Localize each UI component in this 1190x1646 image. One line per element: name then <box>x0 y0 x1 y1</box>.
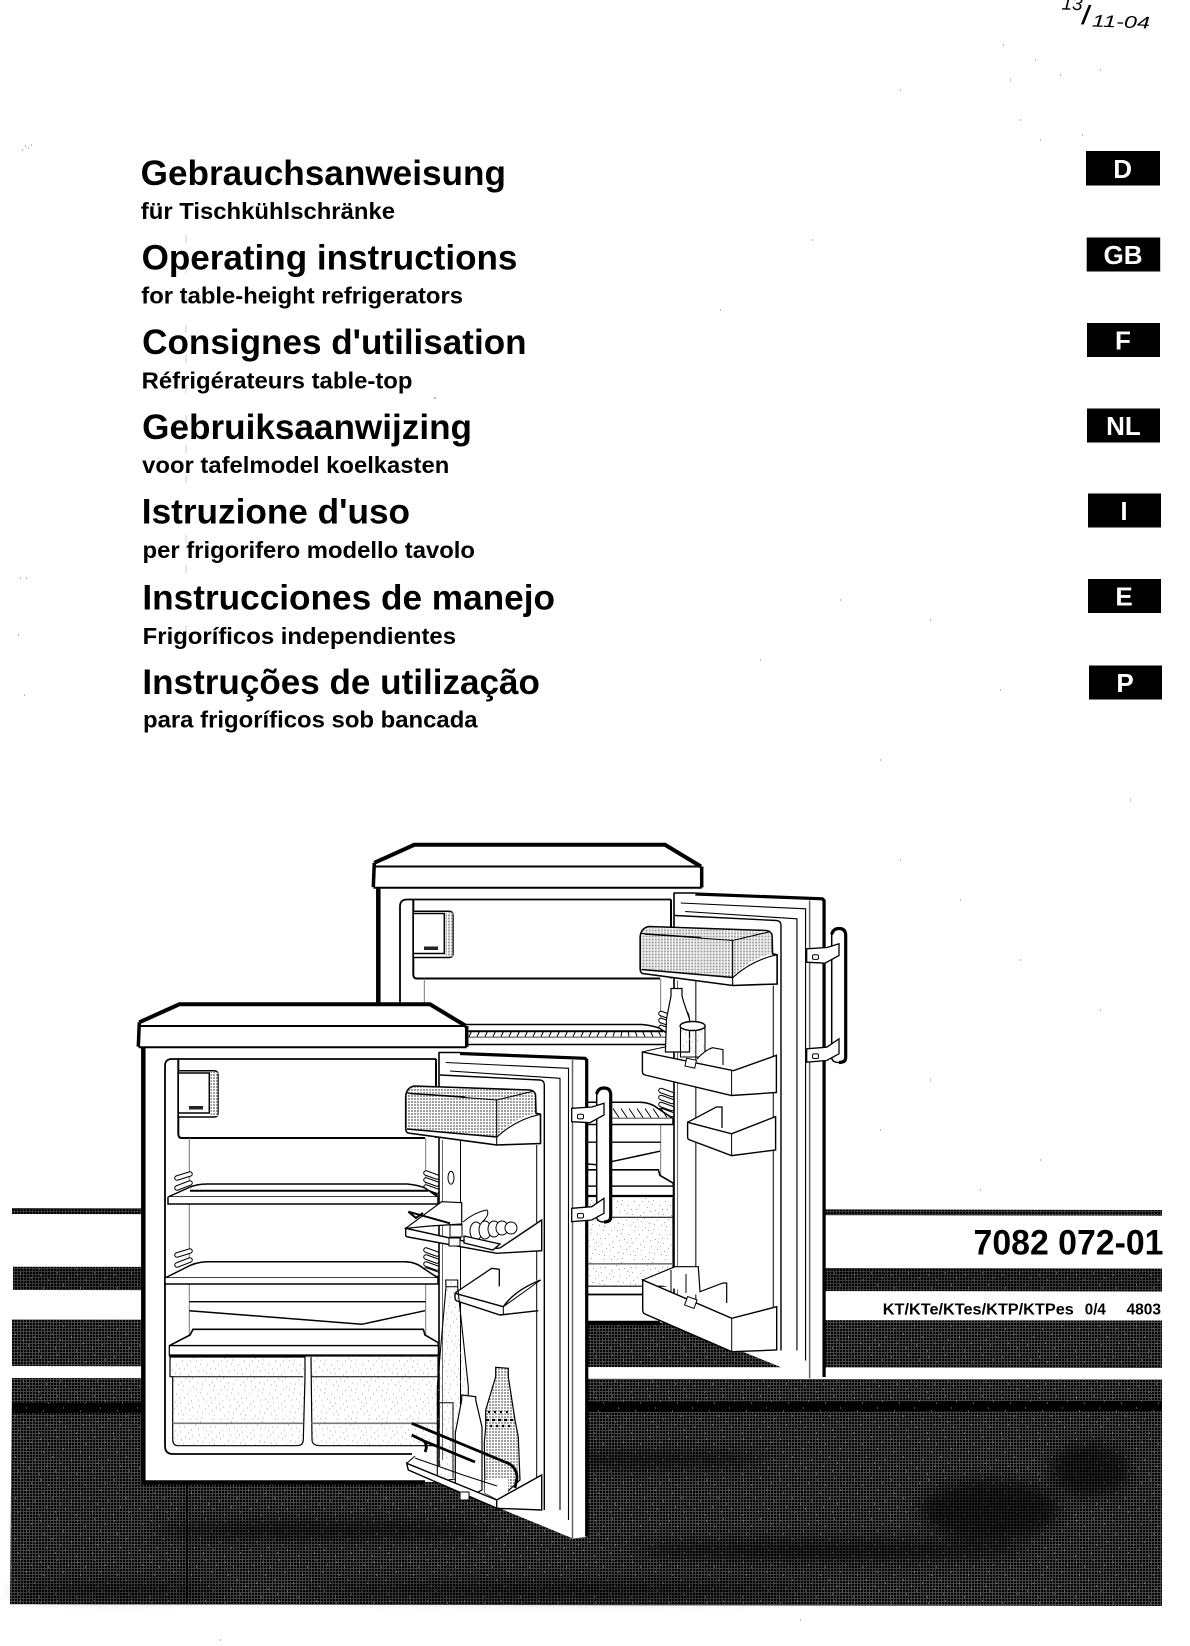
language badge E: E <box>1115 582 1133 612</box>
language badge I: I <box>1120 496 1128 526</box>
heading block: Español: Instrucciones de manejo <box>142 578 555 617</box>
language badge E <box>1088 579 1161 613</box>
heading block: Italiano <box>142 492 475 563</box>
heading block: Português <box>142 663 540 733</box>
rear cabinet <box>373 845 702 1323</box>
rear door shelf middle <box>688 1107 776 1156</box>
model line <box>883 1301 1161 1318</box>
heading block: Deutsch: für Tischkühlschränke <box>141 198 395 224</box>
language badge P <box>1089 666 1162 700</box>
heading block: Italiano: per frigorifero modello tavolo <box>142 537 475 563</box>
rear door shelf upper <box>642 1047 776 1096</box>
background stripes <box>10 1208 1162 1606</box>
heading block: Español <box>142 578 555 649</box>
rear door handle <box>807 928 846 1062</box>
heading block: English <box>141 239 517 309</box>
language badge D <box>1086 151 1160 186</box>
language badge GB <box>1087 238 1160 272</box>
heading block: Français: Réfrigérateurs table-top <box>142 367 412 393</box>
heading block: Nederlands <box>142 408 472 478</box>
egg shelf <box>406 1202 542 1253</box>
tall bottle <box>437 1280 468 1480</box>
rear door shelf lower <box>643 1267 777 1352</box>
heading block: Français <box>142 323 527 393</box>
front cabinet <box>138 1004 467 1482</box>
heading block: Nederlands: Gebruiksaanwijzing <box>142 408 472 447</box>
heading block: Português: para frigoríficos sob bancada <box>143 707 479 733</box>
front refrigerator <box>138 1004 611 1538</box>
model line: KT/KTe/KTes/KTP/KTPes <box>883 1301 1074 1318</box>
handwritten date <box>1061 0 1151 33</box>
heading block: English: Operating instructions <box>142 239 517 278</box>
rear door contents <box>642 988 777 1352</box>
rear refrigerator <box>373 845 846 1379</box>
document number: 7082 072-01 <box>974 1224 1164 1263</box>
language badge NL: NL <box>1106 411 1141 441</box>
language badge F: F <box>1115 326 1131 356</box>
language badge F <box>1087 323 1160 357</box>
heading block: Português: Instruções de utilização <box>142 663 540 702</box>
handwritten date: / <box>1081 0 1092 31</box>
language badge NL <box>1087 408 1160 442</box>
front door handle <box>572 1088 611 1222</box>
small bottle <box>455 1395 482 1495</box>
dotted bottle <box>484 1367 520 1500</box>
model line: 4803 <box>1126 1301 1161 1318</box>
heading block: English: for table-height refrigerators <box>141 283 463 309</box>
heading block: Français: Consignes d'utilisation <box>142 323 527 362</box>
rear shelf hatching <box>405 1030 667 1118</box>
handwritten date: 11-04 <box>1092 12 1150 33</box>
front door <box>406 1052 587 1538</box>
rear door bottle <box>665 988 690 1052</box>
model line: 0/4 <box>1085 1301 1106 1318</box>
heading block: Nederlands: voor tafelmodel koelkasten <box>142 452 449 478</box>
bottom door shelf <box>407 1456 542 1510</box>
heading block: Deutsch: Gebrauchsanweisung <box>141 154 506 193</box>
middle door shelf <box>455 1268 541 1315</box>
heading block: Español: Frigoríficos independientes <box>143 623 456 649</box>
heading block: Deutsch <box>141 154 506 224</box>
bottle retaining rail <box>412 1423 517 1488</box>
rear door <box>640 893 824 1379</box>
language badge P: P <box>1116 668 1134 698</box>
language badge I <box>1088 494 1161 528</box>
language badge GB: GB <box>1104 240 1142 270</box>
heading block: Italiano: Istruzione d'uso <box>142 492 410 531</box>
fold mark and scan specks <box>185 205 187 640</box>
rear door can <box>680 1022 705 1057</box>
language badge D: D <box>1113 154 1132 184</box>
